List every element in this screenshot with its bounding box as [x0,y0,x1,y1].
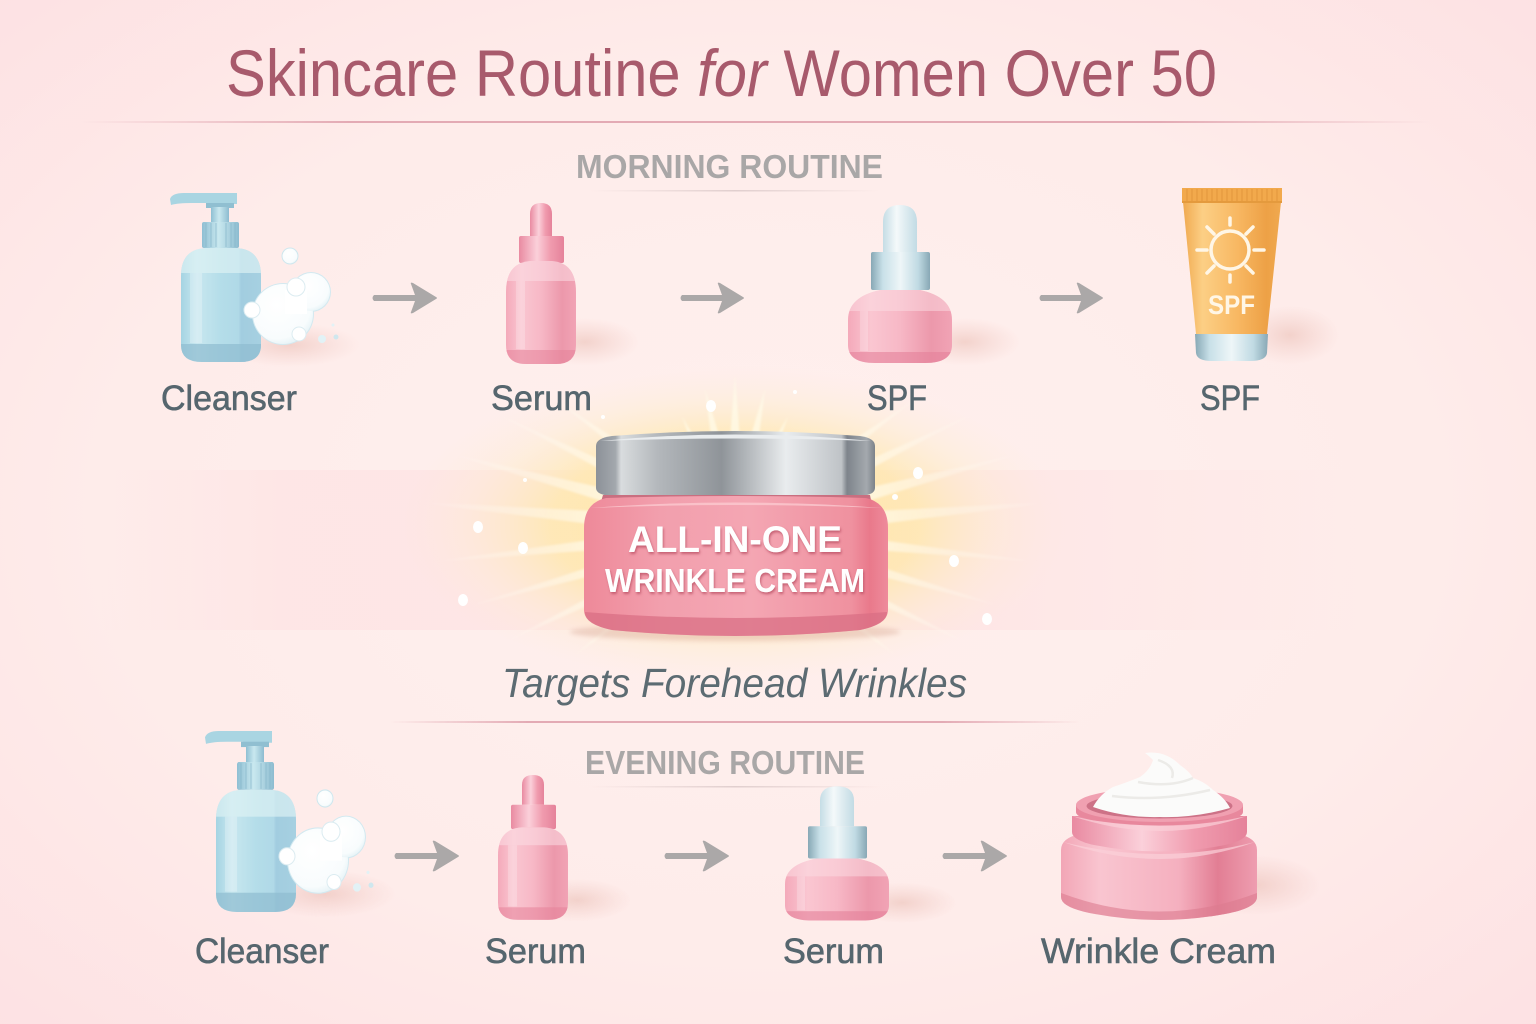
label: SPF: SPF [867,379,927,418]
sparkles [458,390,992,625]
icon: evening serum bottle [497,775,632,922]
arrow: serum to spf [680,283,744,313]
label: SPF tube: SPF [1200,379,1260,418]
icon: open cream jar [1061,752,1320,920]
arrow: serum to cream evening [942,841,1007,871]
jar body [584,496,888,636]
icon: sunscreen tube: SPF [1208,290,1255,320]
icon: morning spf dropper bottle [847,205,1020,366]
label: Wrinkle Cream: Wrinkle Cream [1041,932,1276,971]
icon: morning serum bottle [505,203,640,366]
light rays [410,375,1060,664]
jar label text: ALL-IN-ONE [628,519,842,560]
heading: evening routine: EVENING ROUTINE [585,744,865,781]
label: Serum: Serum [491,379,592,418]
heading: morning routine: MORNING ROUTINE [576,148,883,185]
icon: sunscreen tube [1182,188,1340,365]
tagline: Targets Forehead Wrinkles [502,660,967,706]
arrow: spf to sunscreen [1040,283,1103,313]
central hero: all-in-one wrinkle cream [400,365,1070,685]
glow [400,365,1070,685]
jar label text [605,519,865,599]
icon: morning cleanser pump bottle [170,193,360,367]
arrow: cleanser to serum evening [394,841,459,871]
arrow: cleanser to serum [372,283,437,313]
arrow: serum to serum evening [664,841,729,871]
title: Skincare Routine for Women Over 50 [226,36,1217,110]
jar lid [596,431,875,496]
centre band [100,470,1400,630]
jar label text: WRINKLE CREAM [605,562,865,599]
label: Serum evening second: Serum [783,932,884,971]
icon: evening serum dropper bottle [784,786,957,923]
label: Cleanser: Cleanser [161,379,297,418]
icon: evening cleanser pump bottle [205,731,395,917]
label: Serum evening first: Serum [485,932,586,971]
label: Cleanser evening: Cleanser [195,932,329,971]
